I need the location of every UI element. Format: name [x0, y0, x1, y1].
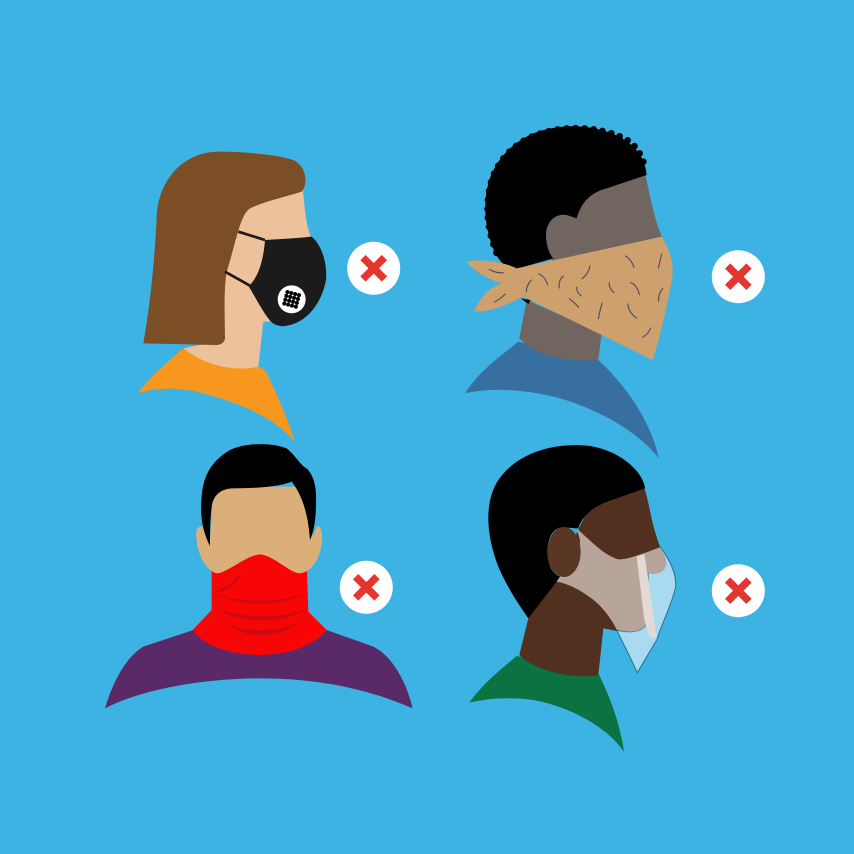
blue shirt: [465, 342, 659, 458]
black mask: [248, 237, 326, 326]
icon: red cross badge, woman with valve mask: [347, 242, 400, 295]
panel: woman with valve mask: [137, 152, 326, 442]
icon: red cross badge, man with bandana: [712, 250, 765, 303]
curly black hair: [485, 126, 647, 304]
grey lower face seen through shield: [557, 528, 666, 632]
clear shield: [617, 547, 676, 673]
brown hair: [143, 152, 305, 345]
neck: [519, 573, 627, 676]
icon: red cross badge, man with neck gaiter: [340, 561, 393, 614]
neck: [519, 300, 602, 360]
gaiter folds: [212, 572, 308, 635]
red neck gaiter: [193, 547, 327, 655]
face and ears: [196, 487, 322, 573]
mask valve: [278, 285, 306, 313]
bandana pattern marks: [489, 254, 663, 337]
black hair: [201, 444, 316, 546]
panel: man with neck gaiter: [105, 444, 413, 708]
mask ear straps: [225, 232, 265, 285]
black hair: [488, 445, 645, 618]
shield highlight: [637, 554, 657, 638]
skin: face and neck: [183, 189, 323, 368]
orange shirt: [137, 349, 295, 442]
face: [573, 485, 663, 573]
panel: man with face shield: [469, 445, 676, 752]
icon: red cross badge, man with face shield: [712, 564, 765, 617]
panel: man with bandana: [465, 126, 673, 458]
face and ear: [546, 170, 662, 263]
purple shirt: [105, 630, 413, 708]
ear: [547, 527, 581, 577]
green shirt: [469, 656, 624, 752]
tan bandana: [466, 237, 673, 360]
